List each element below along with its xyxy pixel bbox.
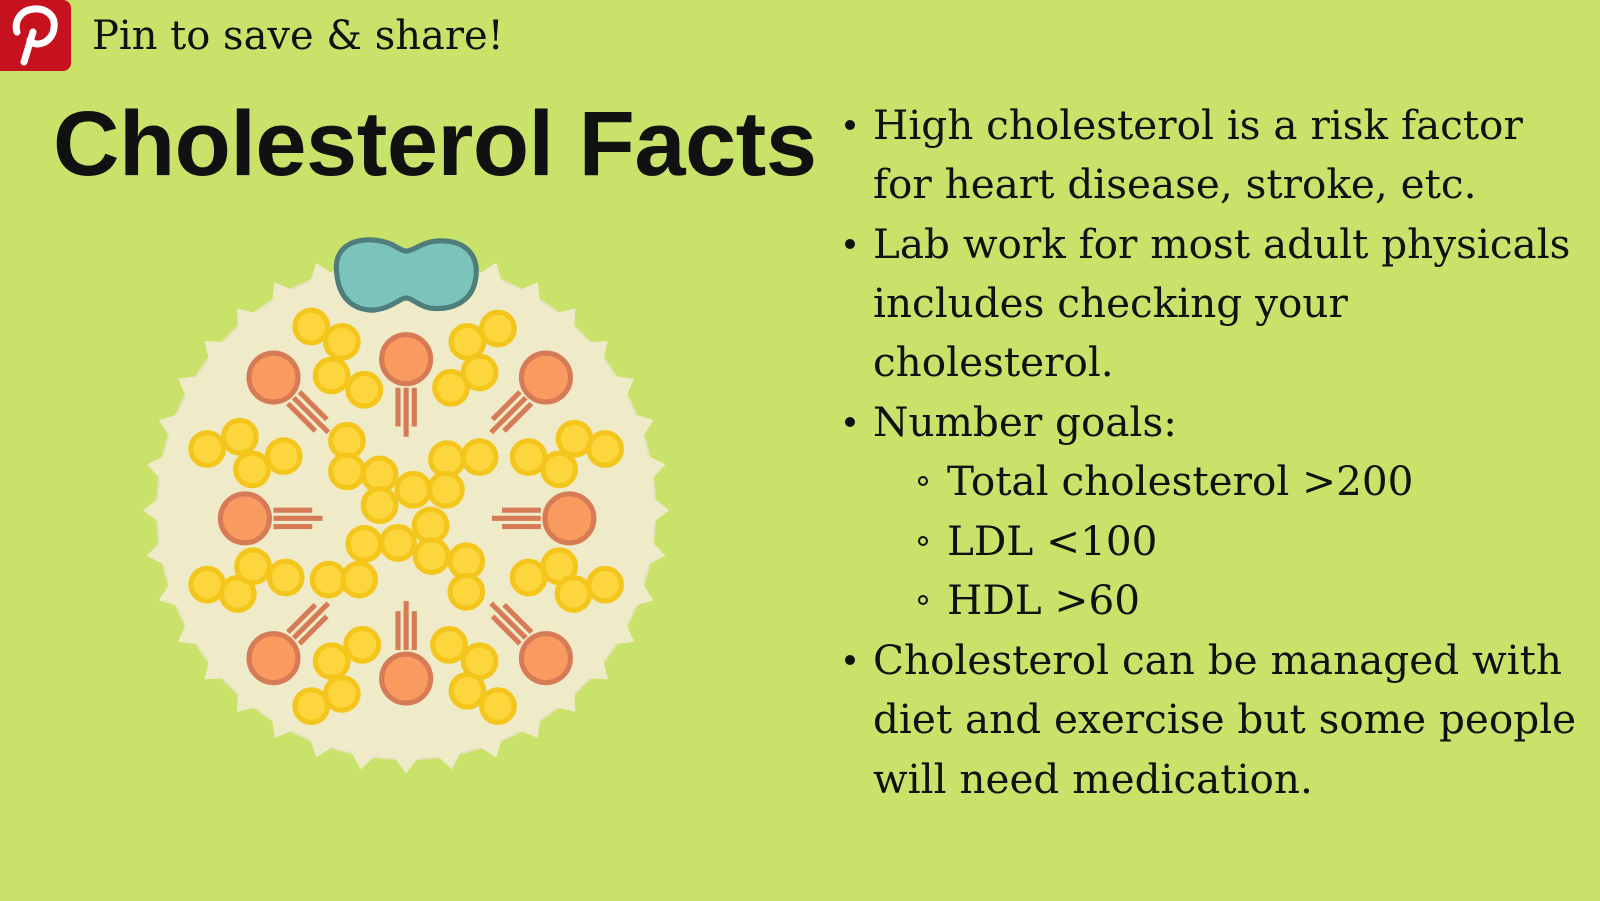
cholesterol beads: [191, 310, 621, 722]
fact list: diet and exercise but some people: [873, 695, 1576, 743]
fact list: cholesterol.: [873, 338, 1114, 386]
fact list: HDL >60: [947, 576, 1140, 624]
fact list: High cholesterol is a risk factor: [873, 101, 1523, 149]
fact list: Number goals:: [873, 398, 1177, 446]
bullet 4: [845, 636, 1576, 803]
teal protein: [336, 240, 476, 310]
fact list: for heart disease, stroke, etc.: [873, 160, 1476, 208]
fact list: [845, 101, 1576, 803]
bullet 3: number goals: [845, 398, 1413, 624]
lipid heads: [220, 335, 594, 703]
fact list: LDL <100: [947, 517, 1157, 565]
fact list: includes checking your: [873, 279, 1348, 327]
bullet 2: [845, 220, 1570, 386]
text: pin to save: Pin to save & share!: [92, 13, 504, 59]
icon: pinterest: [0, 0, 71, 71]
fact list: will need medication.: [873, 755, 1313, 803]
bullet 1: [845, 101, 1523, 208]
starburst: [143, 247, 669, 773]
fact list: Lab work for most adult physicals: [873, 220, 1570, 268]
fact list: Cholesterol can be managed with: [873, 636, 1562, 684]
fact list: Total cholesterol >200: [947, 457, 1413, 505]
title: Cholesterol Facts: [53, 93, 816, 195]
